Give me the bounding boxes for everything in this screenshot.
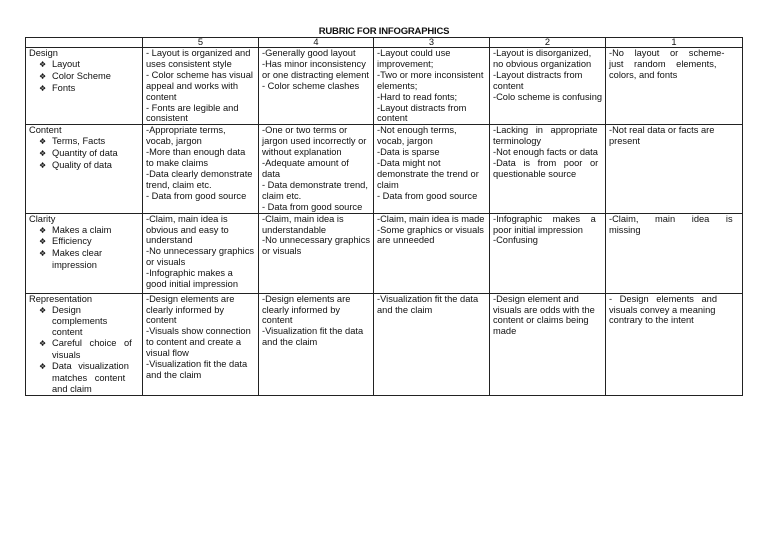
rubric table: Terms, Facts bbox=[52, 136, 105, 146]
rubric table: visual flow bbox=[146, 348, 189, 358]
rubric table: or visuals bbox=[262, 246, 301, 256]
rubric table: - Layout is organized and bbox=[146, 48, 250, 58]
rubric table: clearly informed by bbox=[146, 304, 224, 314]
rubric table: no obvious organization bbox=[493, 59, 591, 69]
rubric table: - Data demonstrate trend, bbox=[262, 180, 368, 190]
rubric table: colors, and fonts bbox=[609, 70, 677, 80]
rubric table: made bbox=[493, 326, 516, 336]
rubric table: matches content bbox=[52, 373, 125, 383]
rubric table: impression bbox=[52, 260, 97, 270]
rubric table: to make claims bbox=[146, 158, 208, 168]
rubric table: -Infographic makes a bbox=[146, 268, 233, 278]
rubric table: Careful choice of bbox=[52, 338, 132, 348]
rubric table: jargon used incorrectly or bbox=[262, 136, 366, 146]
rubric table: -Claim, main idea is bbox=[146, 214, 228, 224]
rubric table: and the claim bbox=[377, 304, 432, 314]
rubric table: complements bbox=[52, 316, 107, 326]
rubric table: -Layout could use bbox=[377, 48, 450, 58]
rubric table: Color Scheme bbox=[52, 71, 111, 81]
rubric table: -No unnecessary graphics bbox=[262, 235, 370, 245]
rubric table: -Confusing bbox=[493, 235, 538, 245]
rubric table: Clarity bbox=[29, 214, 55, 224]
rubric table: good initial impression bbox=[146, 279, 238, 289]
rubric table: elements; bbox=[377, 81, 417, 91]
rubric table: -No unnecessary graphics bbox=[146, 246, 254, 256]
rubric table: -Lacking in appropriate bbox=[493, 125, 598, 135]
rubric table: without explanation bbox=[262, 147, 342, 157]
rubric table: content bbox=[146, 315, 176, 325]
rubric table: Fonts bbox=[52, 83, 75, 93]
rubric table: vocab, jargon bbox=[146, 136, 202, 146]
rubric table: -More than enough data bbox=[146, 147, 245, 157]
rubric table: and claim bbox=[52, 384, 92, 394]
title: RUBRIC FOR INFOGRAPHICS bbox=[319, 26, 449, 37]
rubric table: -Data is sparse bbox=[377, 147, 440, 157]
rubric table: Data visualization bbox=[52, 361, 129, 371]
rubric table: clearly informed by bbox=[262, 304, 340, 314]
rubric table: and the claim bbox=[262, 337, 317, 347]
rubric table: content bbox=[493, 81, 524, 91]
rubric table: - Design elements and bbox=[609, 294, 717, 304]
rubric table: trend, claim etc. bbox=[146, 180, 212, 190]
rubric table: data bbox=[262, 169, 280, 179]
rubric table: or visuals bbox=[146, 257, 185, 267]
rubric table: -Layout distracts from bbox=[377, 103, 466, 113]
rubric table: visuals are odds with the bbox=[493, 304, 595, 314]
rubric table: are unneeded bbox=[377, 235, 434, 245]
rubric table: terminology bbox=[493, 136, 541, 146]
rubric table: Makes a claim bbox=[52, 224, 111, 234]
rubric table: obvious and easy to bbox=[146, 224, 229, 234]
rubric table: claim etc. bbox=[262, 191, 301, 201]
rubric table: content bbox=[52, 327, 82, 337]
rubric table: -Layout distracts from bbox=[493, 70, 582, 80]
rubric table: -Visualization fit the data bbox=[377, 294, 478, 304]
rubric table: content or claims being bbox=[493, 315, 589, 325]
rubric table: -Design element and bbox=[493, 294, 579, 304]
rubric table: -Not enough facts or data bbox=[493, 147, 598, 157]
rubric table: Quality of data bbox=[52, 160, 112, 170]
rubric table: vocab, jargon bbox=[377, 136, 433, 146]
rubric table: content bbox=[377, 113, 408, 123]
rubric table: - Data from good source bbox=[262, 202, 362, 212]
rubric table: contrary to the intent bbox=[609, 315, 694, 325]
rubric table: uses consistent style bbox=[146, 59, 232, 69]
rubric table: poor initial impression bbox=[493, 224, 583, 234]
rubric table: missing bbox=[609, 224, 641, 234]
rubric table: -Two or more inconsistent bbox=[377, 70, 483, 80]
rubric table: -Not enough terms, bbox=[377, 125, 457, 135]
rubric table: improvement; bbox=[377, 59, 433, 69]
rubric table: -Claim, main idea is bbox=[262, 214, 344, 224]
rubric table: -Data is from poor or bbox=[493, 158, 598, 168]
rubric table: -Generally good layout bbox=[262, 48, 356, 58]
rubric table: -Data might not bbox=[377, 158, 441, 168]
rubric table: - Data from good source bbox=[377, 191, 477, 201]
rubric table: Representation bbox=[29, 294, 92, 304]
rubric table: just random elements, bbox=[609, 59, 716, 69]
rubric table: -Has minor inconsistency bbox=[262, 59, 366, 69]
rubric table bbox=[25, 37, 743, 396]
rubric table: or one distracting element bbox=[262, 70, 369, 80]
rubric table: content bbox=[262, 315, 292, 325]
rubric table: demonstrate the trend or bbox=[377, 169, 479, 179]
rubric table: -Not real data or facts are bbox=[609, 125, 714, 135]
rubric table: visuals bbox=[52, 350, 80, 360]
rubric table: - Data from good source bbox=[146, 191, 246, 201]
rubric table: understandable bbox=[262, 224, 326, 234]
rubric table: -Infographic makes a bbox=[493, 214, 596, 224]
rubric table: visuals convey a meaning bbox=[609, 304, 715, 314]
rubric table: -Design elements are bbox=[146, 294, 234, 304]
rubric table: Design bbox=[52, 304, 81, 314]
rubric table: -Visualization fit the data bbox=[262, 326, 363, 336]
rubric table: -Visuals show connection bbox=[146, 326, 251, 336]
rubric table: content bbox=[146, 92, 176, 102]
rubric table: -No layout or scheme- bbox=[609, 48, 724, 58]
rubric table: - Color scheme has visual bbox=[146, 70, 253, 80]
rubric table: -Hard to read fonts; bbox=[377, 92, 457, 102]
rubric table: -Visualization fit the data bbox=[146, 359, 247, 369]
rubric table: -Some graphics or visuals bbox=[377, 224, 484, 234]
rubric table: claim bbox=[377, 180, 399, 190]
rubric table: Layout bbox=[52, 59, 80, 69]
rubric table: Makes clear bbox=[52, 248, 102, 258]
rubric table: -Layout is disorganized, bbox=[493, 48, 591, 58]
rubric table: - Color scheme clashes bbox=[262, 81, 359, 91]
rubric table: Content bbox=[29, 125, 62, 135]
rubric table: -One or two terms or bbox=[262, 125, 347, 135]
rubric table: Design bbox=[29, 48, 58, 58]
rubric table: Efficiency bbox=[52, 236, 92, 246]
rubric table: understand bbox=[146, 235, 193, 245]
rubric table: -Claim, main idea is bbox=[609, 214, 733, 224]
rubric table: - Fonts are legible and bbox=[146, 103, 239, 113]
rubric table: to content and create a bbox=[146, 337, 241, 347]
rubric table: -Data clearly demonstrate bbox=[146, 169, 252, 179]
rubric table: present bbox=[609, 136, 640, 146]
rubric table: questionable source bbox=[493, 169, 576, 179]
rubric table: -Design elements are bbox=[262, 294, 350, 304]
rubric table: -Colo scheme is confusing bbox=[493, 92, 602, 102]
rubric table: -Appropriate terms, bbox=[146, 125, 226, 135]
rubric table: consistent bbox=[146, 113, 188, 123]
rubric table: and the claim bbox=[146, 370, 201, 380]
rubric table: appeal and works with bbox=[146, 81, 238, 91]
rubric table: -Claim, main idea is made bbox=[377, 214, 484, 224]
rubric table: -Adequate amount of bbox=[262, 158, 349, 168]
rubric table: Quantity of data bbox=[52, 148, 118, 158]
